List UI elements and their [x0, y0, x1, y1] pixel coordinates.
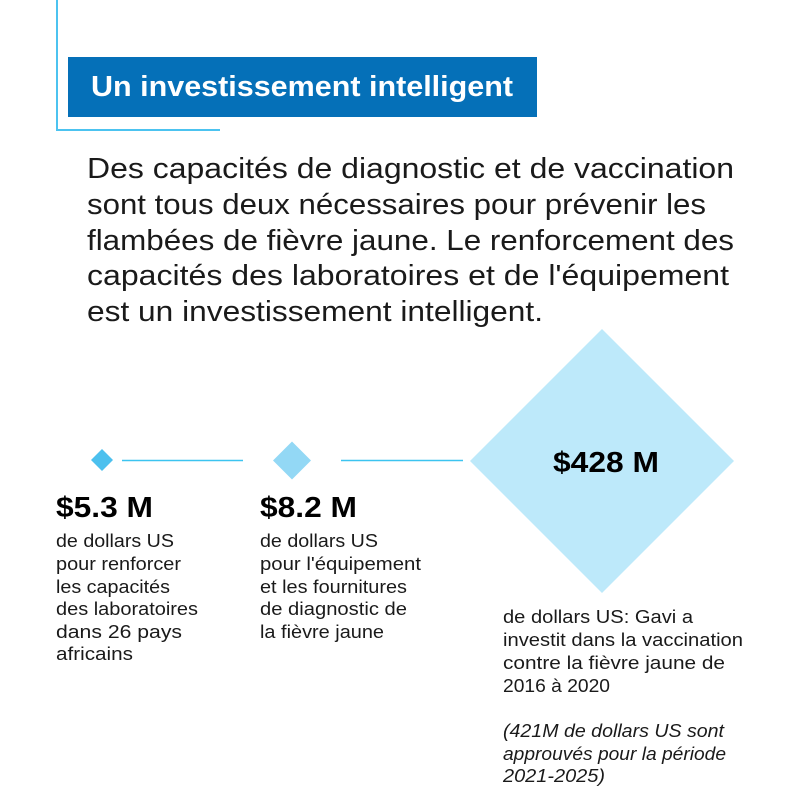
stat: 8.2 M: et les fournitures: [260, 577, 407, 597]
stat: 8.2 M: pour l'équipement: [260, 554, 421, 574]
icon: medium diamond: [273, 442, 311, 480]
stat description: 428 M: contre la fièvre jaune de: [503, 653, 725, 673]
stat description: 428 M: de dollars US: Gavi a: [503, 607, 694, 627]
intro paragraph: flambées de fièvre jaune. Le renforcement des: [87, 225, 734, 257]
stat: 5.3 M: $5.3 M: [56, 492, 153, 524]
frame line: heading corner: [57, 0, 220, 130]
stat description: 428 M: investit dans la vaccination: [503, 630, 743, 650]
intro paragraph: est un investissement intelligent.: [87, 296, 543, 328]
stat: 8.2 M: [260, 492, 421, 642]
stat: 5.3 M: dans 26 pays: [56, 622, 182, 642]
stat description: 428 M: approuvés pour la période: [503, 744, 726, 764]
intro paragraph: [87, 153, 734, 328]
connector line 2: [341, 460, 463, 462]
stat: 5.3 M: pour renforcer: [56, 554, 181, 574]
heading banner: [68, 57, 537, 117]
stat description: 428 M: 2021-2025): [502, 766, 605, 786]
large diamond with amount: $428 M: [553, 447, 659, 479]
stat: 8.2 M: de diagnostic de: [260, 599, 407, 619]
stat description: 428 M: 2016 à 2020: [503, 676, 610, 696]
connector line 1: [122, 460, 243, 462]
stat: 8.2 M: $8.2 M: [260, 492, 357, 524]
intro paragraph: Des capacités de diagnostic et de vaccination: [87, 153, 734, 185]
stat description: 428 M: [502, 607, 743, 786]
heading banner: Un investissement intelligent: [91, 71, 513, 103]
large diamond with amount: [470, 329, 734, 593]
stat: 8.2 M: la fièvre jaune: [260, 622, 384, 642]
icon: small diamond: [91, 449, 113, 471]
intro paragraph: capacités des laboratoires et de l'équipement: [87, 260, 729, 292]
stat: 5.3 M: les capacités: [56, 577, 170, 597]
stat: 5.3 M: des laboratoires: [56, 599, 198, 619]
intro paragraph: sont tous deux nécessaires pour prévenir les: [87, 189, 706, 221]
stat: 8.2 M: de dollars US: [260, 531, 378, 551]
stat description: 428 M: (421M de dollars US sont: [503, 721, 725, 741]
stat: 5.3 M: [56, 492, 198, 664]
stat: 5.3 M: africains: [56, 644, 133, 664]
stat: 5.3 M: de dollars US: [56, 531, 174, 551]
